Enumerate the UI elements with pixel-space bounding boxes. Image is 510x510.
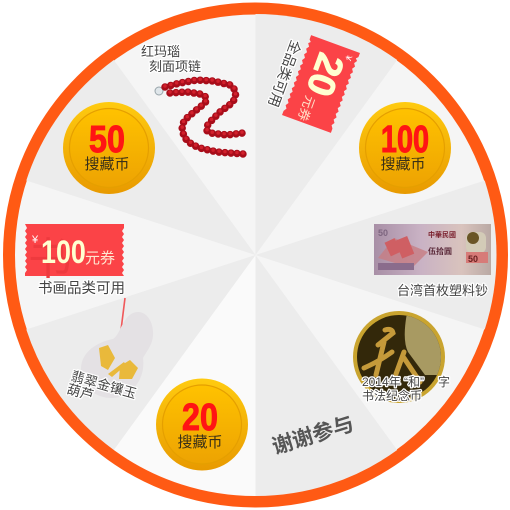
voucher amount: 100 xyxy=(41,235,86,271)
voucher amount: 20 xyxy=(297,48,351,102)
prize: Taiwan polymer banknote xyxy=(374,224,491,298)
prize: red agate necklace xyxy=(141,44,243,154)
coin value: 20 xyxy=(182,397,218,439)
voucher label: 全品类可用 xyxy=(265,38,304,109)
voucher label: 书画品类可用 xyxy=(38,280,125,297)
coin label: 书法纪念币 xyxy=(362,388,422,403)
voucher currency mark: ¥ xyxy=(343,53,355,63)
prize: calligraphy voucher xyxy=(25,224,125,297)
coin label: 搜藏币 xyxy=(84,156,130,173)
gourd label: 翡翠金镶玉 xyxy=(69,368,138,401)
prize: 2014 commemorative coin xyxy=(353,311,450,403)
banknote: 50 xyxy=(468,254,478,264)
banknote xyxy=(374,224,491,275)
voucher xyxy=(25,224,124,276)
coin xyxy=(156,378,248,470)
coin label: 搜藏币 xyxy=(177,434,223,451)
banknote: 50 xyxy=(378,228,388,238)
gold ornament xyxy=(99,345,138,379)
prize: jade gourd xyxy=(65,298,153,403)
gourd xyxy=(81,312,153,398)
coin label: 字 xyxy=(438,374,450,389)
gourd label second line: 葫芦 xyxy=(65,381,95,403)
faded watermark: 书 xyxy=(28,235,72,284)
prize: 100 coins xyxy=(359,102,451,194)
thanks for participating: 谢谢参与 xyxy=(269,412,357,459)
banknote: 中華民國 xyxy=(428,230,456,239)
necklace clasp xyxy=(155,87,163,95)
coin value: 100 xyxy=(381,118,429,161)
necklace label: 刻面项链 xyxy=(149,59,201,74)
coin xyxy=(359,102,451,194)
necklace beads xyxy=(165,79,243,154)
banknote: 伍拾圓 xyxy=(428,246,452,256)
coin value: 50 xyxy=(89,119,125,161)
prize: 50 coins xyxy=(63,102,155,194)
currency mark: ¥ xyxy=(31,234,39,246)
coin xyxy=(63,102,155,194)
prize: 20 coins xyxy=(156,378,248,470)
voucher unit: 元券 xyxy=(85,250,115,267)
banknote label: 台湾首枚塑料钞 xyxy=(397,283,488,298)
coin label: 搜藏币 xyxy=(380,156,426,173)
rotated voucher xyxy=(282,35,360,133)
gourd string xyxy=(120,298,125,338)
voucher unit: 元券 xyxy=(295,94,318,123)
gold coin xyxy=(353,311,445,403)
coin label: 2014年 xyxy=(362,375,401,389)
necklace label: 红玛瑙 xyxy=(141,44,180,59)
prize: 20 yuan voucher xyxy=(265,35,360,133)
coin label: “和” xyxy=(404,375,424,389)
